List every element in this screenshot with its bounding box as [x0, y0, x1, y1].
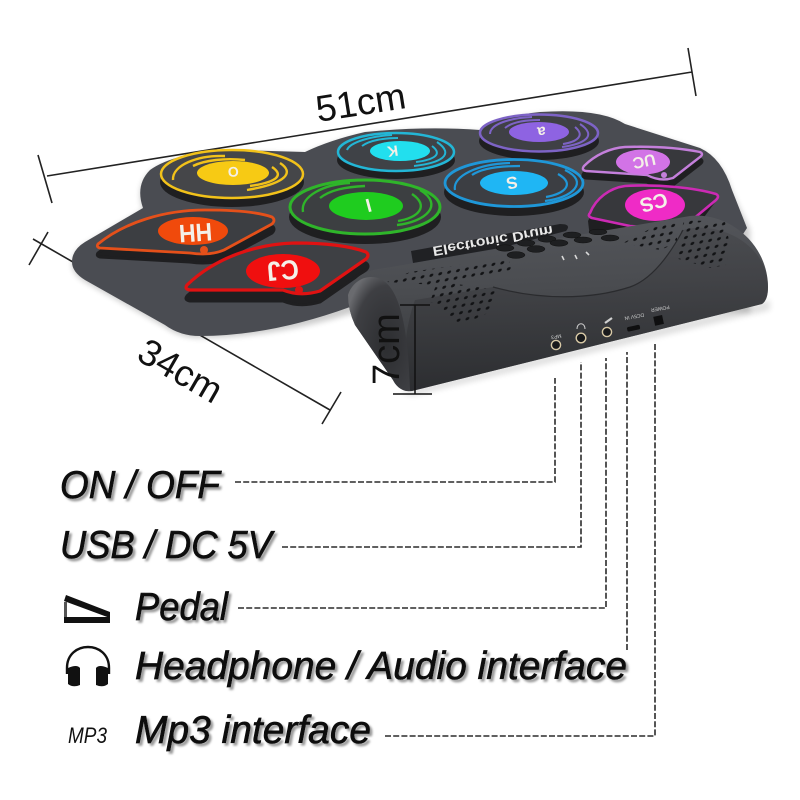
- label: Headphone / Audio interface: Headphone / Audio interface: [135, 645, 627, 688]
- leader: ON / OFF: [235, 378, 555, 482]
- label: ON / OFF: ON / OFF: [60, 464, 222, 507]
- pad: orange HH: [97, 210, 274, 263]
- nameplate: Electronic Drum: [411, 223, 568, 263]
- pad: blue S: [444, 160, 584, 216]
- pad: magenta CS: [588, 185, 718, 238]
- dimension: depth 34cm: [29, 232, 341, 424]
- speaker grilles: [387, 258, 512, 305]
- dimension: height 7cm: [366, 305, 432, 394]
- port labels: MP3: [550, 332, 562, 340]
- left end cap: [348, 277, 410, 391]
- label: Pedal: Pedal: [135, 586, 229, 629]
- leader: USB / DC 5V: [282, 362, 581, 547]
- dimension: width 51cm: [38, 48, 696, 203]
- control unit speaker bar: [348, 216, 770, 396]
- pad: green I: [289, 180, 441, 244]
- port labels: POWER: [650, 303, 670, 313]
- pad: violet UC: [583, 147, 702, 186]
- control buttons: [496, 229, 619, 258]
- pad: cyan K: K: [386, 141, 399, 160]
- pad: blue S: S: [505, 172, 519, 193]
- leader: Mp3: [385, 342, 655, 736]
- pad: purple a: a: [536, 122, 547, 141]
- pad: purple a: [479, 114, 599, 160]
- leader: Pedal: [238, 358, 606, 608]
- pad: violet UC: UC: [630, 150, 657, 171]
- dimension: height 7cm: 7cm: [366, 313, 408, 385]
- pad: yellow O: O: [227, 164, 239, 180]
- indicator marks: [562, 252, 589, 260]
- usb port and switch: [627, 315, 664, 332]
- nameplate: Electronic Drum: Electronic Drum: [431, 223, 554, 259]
- port labels: [550, 303, 670, 340]
- icon: pedal: [64, 595, 110, 623]
- icon: MP3: MP3: [68, 723, 108, 748]
- pad: red CJ: [186, 243, 368, 305]
- pad: green I: I: [363, 193, 374, 215]
- pad: yellow O: [160, 150, 304, 207]
- pad: magenta CS: CS: [637, 188, 670, 216]
- pad: red CJ: CJ: [266, 253, 300, 287]
- icon: headphones: [67, 647, 109, 686]
- front face with jacks: [405, 228, 768, 391]
- label: Mp3 interface: Mp3 interface: [135, 709, 371, 752]
- label: USB / DC 5V: USB / DC 5V: [60, 524, 276, 567]
- pad: orange HH: HH: [178, 217, 213, 247]
- electronic drum mat: [72, 111, 750, 338]
- jack: mp3: [551, 327, 612, 350]
- pad: cyan K: [337, 133, 455, 179]
- dimension: depth 34cm: 34cm: [131, 330, 230, 411]
- port labels: DC5V IN: [624, 311, 644, 321]
- leader: Headphone: [626, 352, 628, 650]
- dimension: width 51cm: 51cm: [313, 75, 409, 130]
